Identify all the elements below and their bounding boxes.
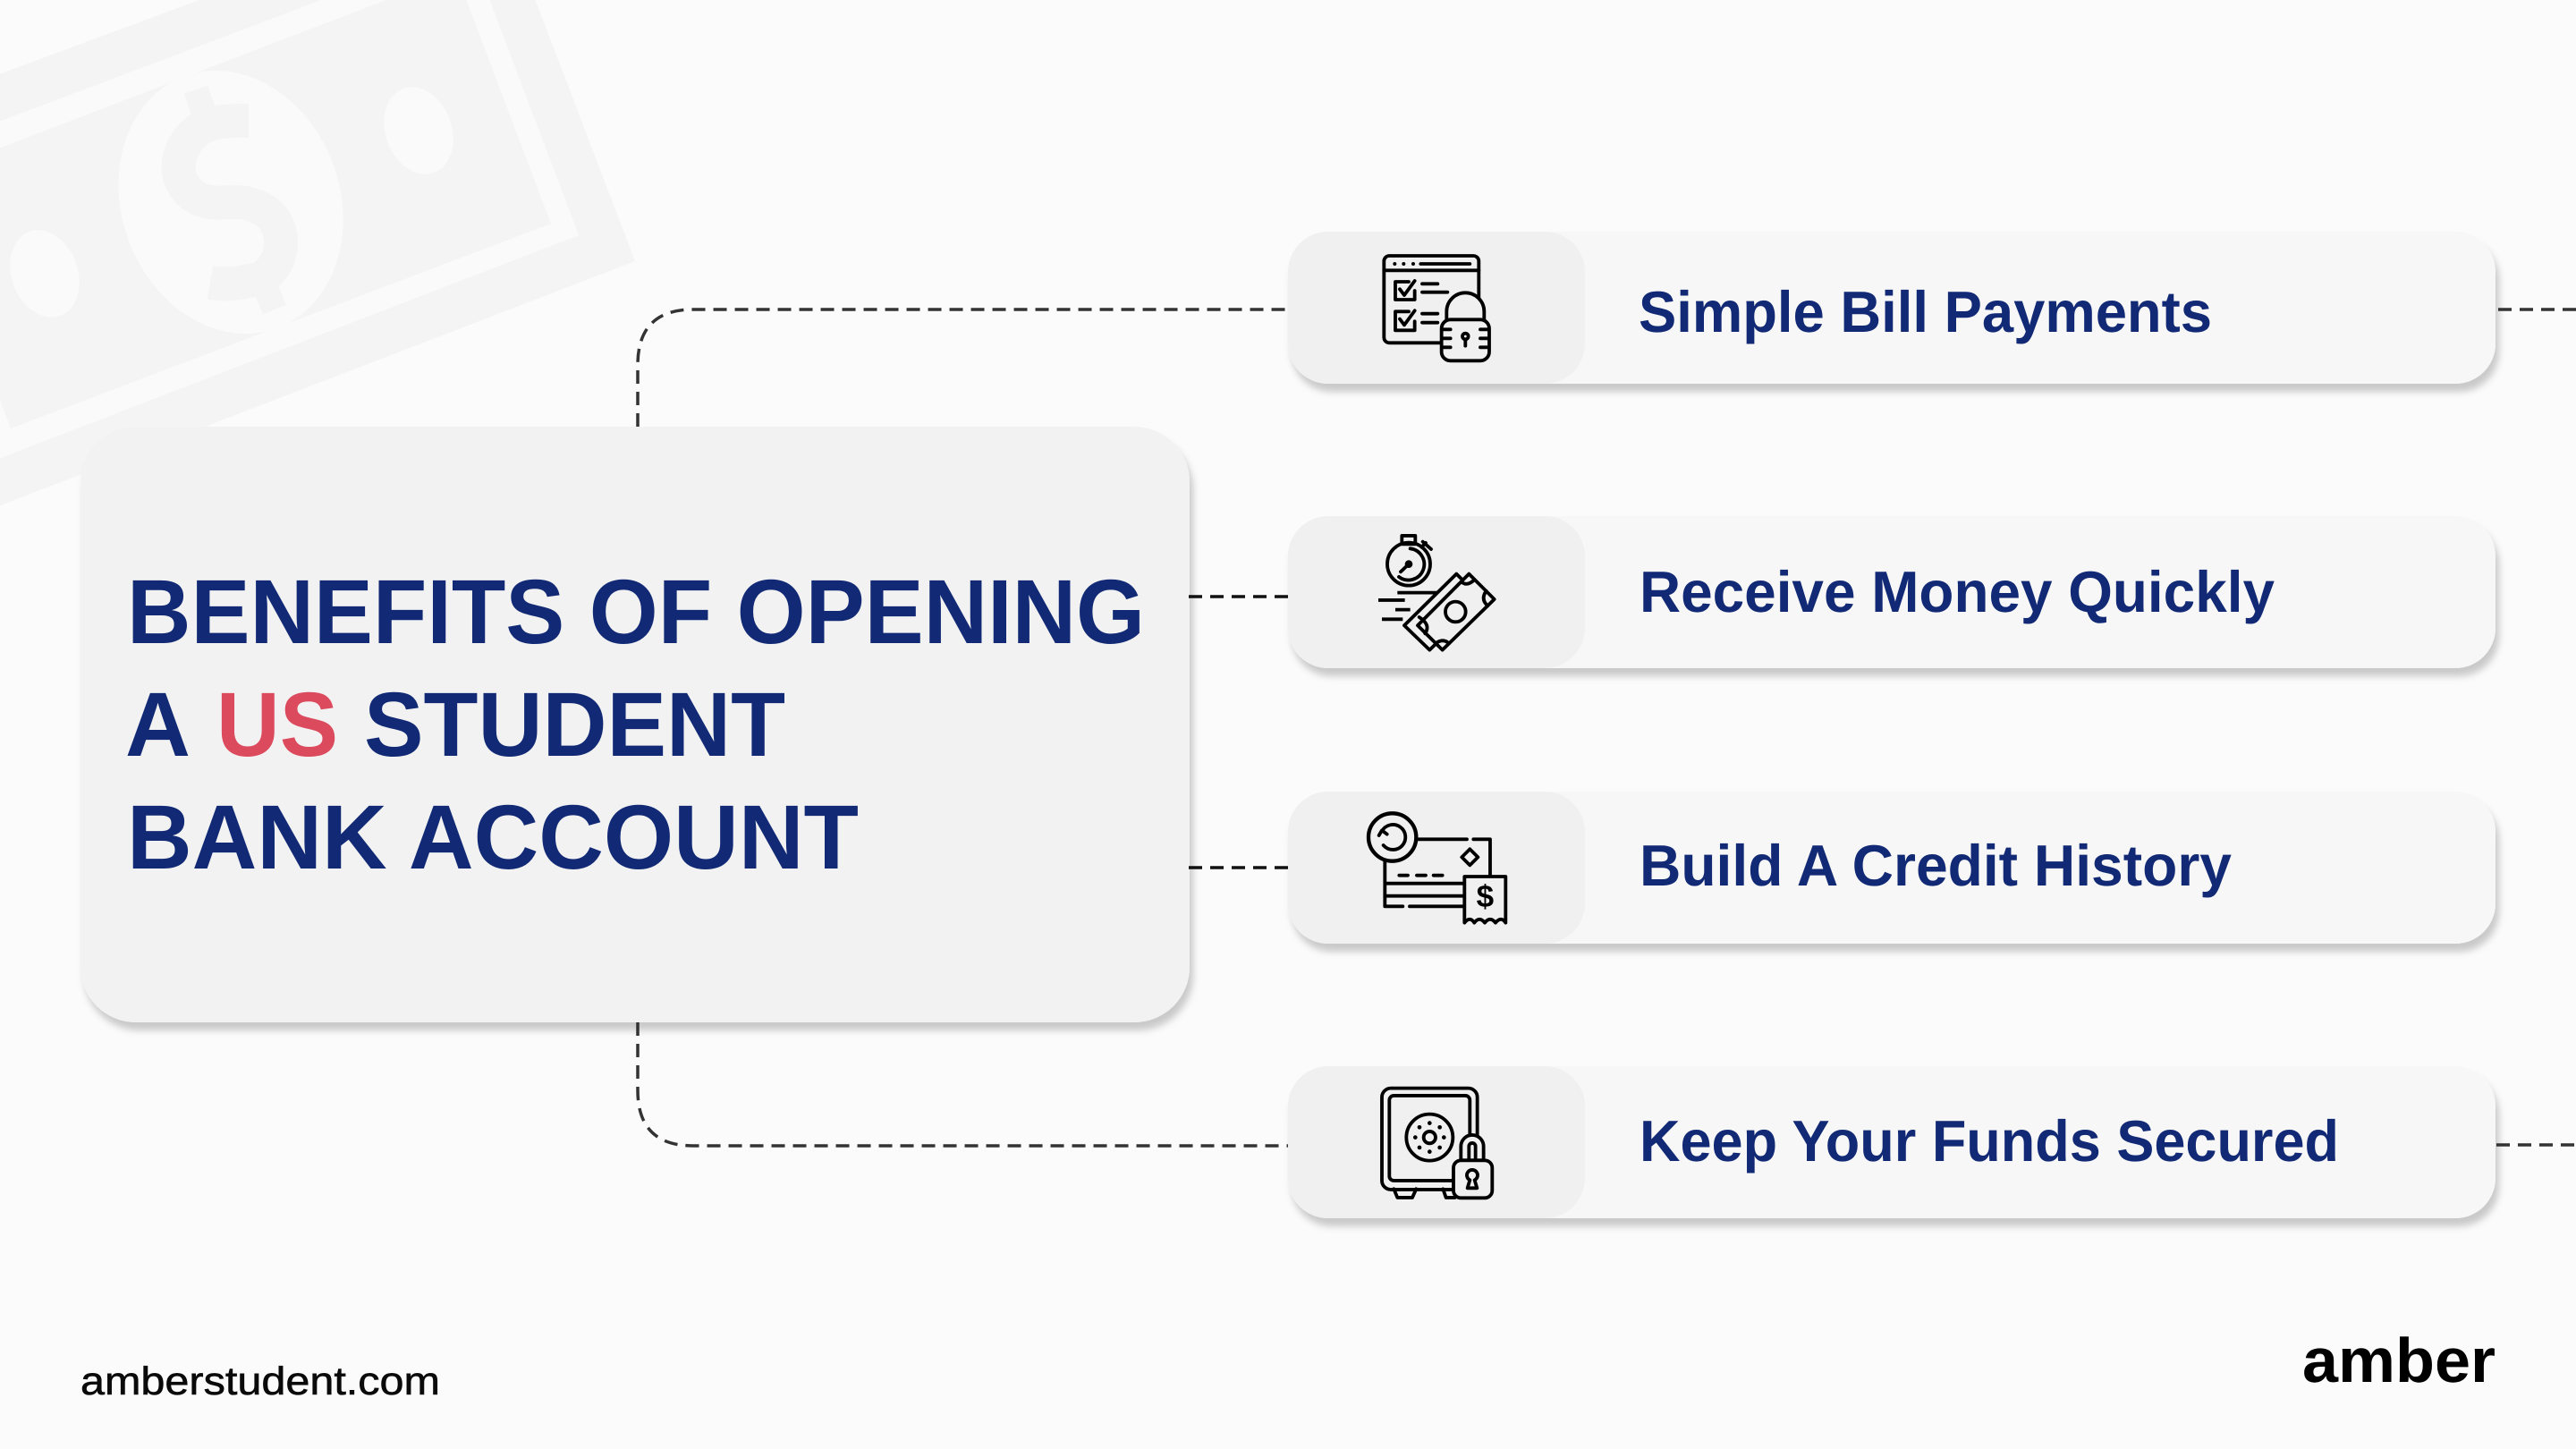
watermark: dollar bill: [0, 0, 635, 513]
title: STUDENT: [364, 674, 785, 775]
footer website: amberstudent.com: [80, 1360, 440, 1403]
card: Keep Your Funds Secured: [1288, 1066, 2496, 1218]
card: Receive Money Quickly: [1288, 516, 2496, 668]
card label: Receive Money Quickly: [1640, 559, 2275, 624]
title: A: [125, 674, 191, 775]
connector: main panel to Simple Bill Payments: [638, 309, 1288, 427]
icon: safe with padlock: [1382, 1089, 1492, 1198]
brand logo: amber: [2302, 1326, 2496, 1395]
card: Simple Bill Payments: [1288, 232, 2496, 384]
connector: main panel to Receive Money Quickly: [1189, 595, 1289, 598]
card label: Build A Credit History: [1640, 833, 2232, 898]
icon: checklist with padlock: [1384, 256, 1489, 360]
title: BANK ACCOUNT: [127, 786, 859, 888]
connector: main panel to Keep Your Funds Secured: [638, 1022, 1288, 1146]
title: BENEFITS OF OPENING: [127, 561, 1145, 663]
title: US: [216, 674, 338, 775]
card label: Simple Bill Payments: [1639, 279, 2212, 344]
icon: stopwatch and banknotes: [1378, 536, 1495, 650]
title: [125, 561, 1145, 888]
connector: main panel to Build A Credit History: [1189, 866, 1289, 869]
card label: Keep Your Funds Secured: [1640, 1108, 2339, 1174]
icon: credit card with receipt: $: [1477, 879, 1494, 914]
card: Build A Credit History: [1288, 792, 2496, 944]
connector: right stub top: [2498, 308, 2576, 311]
panel: main title card: [80, 427, 1190, 1022]
connector: right stub bottom: [2496, 1143, 2576, 1147]
icon: credit card with receipt: [1368, 813, 1505, 923]
